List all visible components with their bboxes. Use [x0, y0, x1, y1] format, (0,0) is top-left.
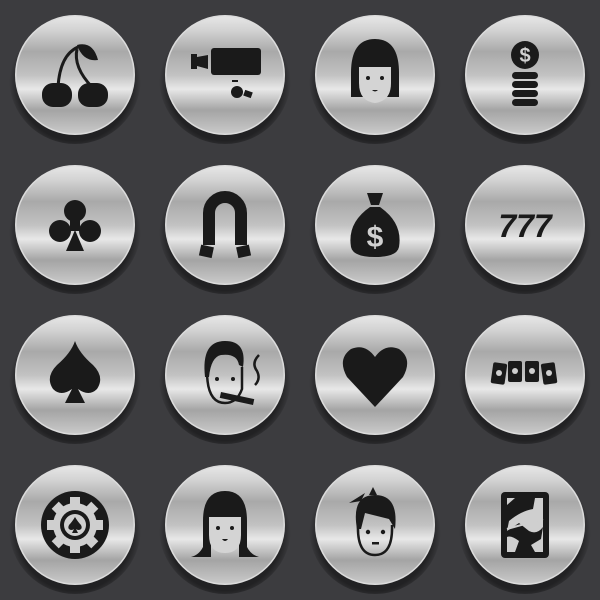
icon: girl [309, 12, 441, 144]
icon: card [459, 462, 591, 594]
icon: spade [9, 312, 141, 444]
icon: coins: $ [519, 45, 531, 67]
icon: horseshoe [159, 162, 291, 294]
icon: smoking man [159, 312, 291, 444]
icon: woman [159, 462, 291, 594]
icon: cherry [9, 12, 141, 144]
icon: club [9, 162, 141, 294]
icon: 777: 777 [498, 208, 554, 244]
icon: coins [459, 12, 591, 144]
icon: boy [309, 462, 441, 594]
icon: cards [459, 312, 591, 444]
icon: camera [159, 12, 291, 144]
icon: chip gear [9, 462, 141, 594]
icon: money bag: $ [367, 221, 384, 254]
icon: 777 [459, 162, 591, 294]
icon: heart [309, 312, 441, 444]
icon: money bag [309, 162, 441, 294]
